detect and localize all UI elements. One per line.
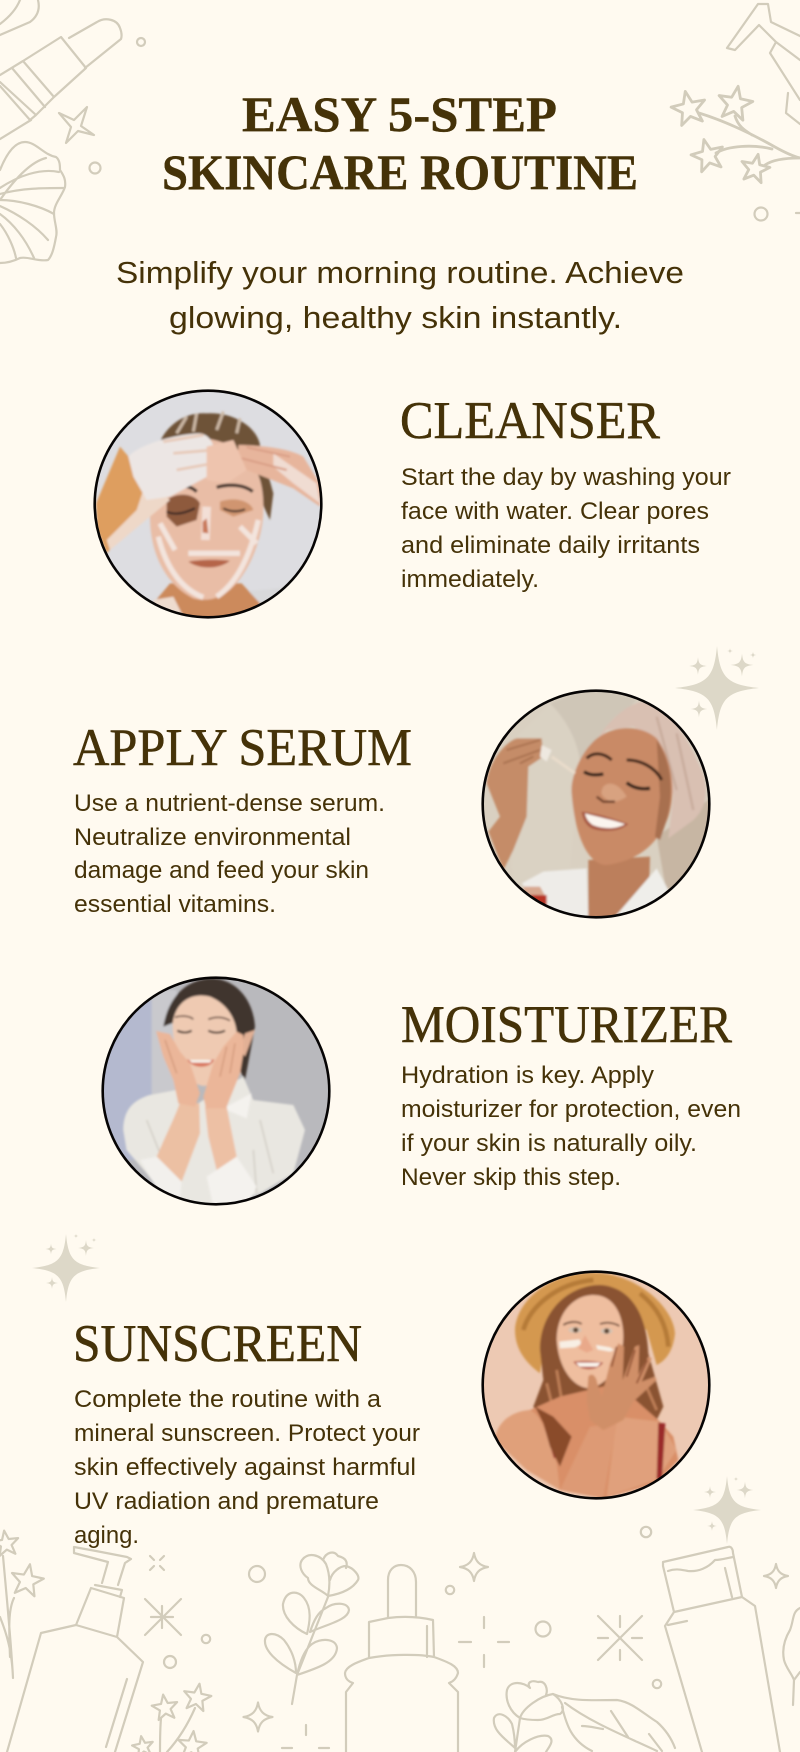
step 4 text: sunscreen: Complete the routine with a [74,1386,381,1413]
subtitle [116,256,684,335]
step 3 text: moisturizer: if your skin is naturally oily. [401,1130,697,1157]
decoration: bottom-center flower and leaf line art [494,1681,675,1752]
decoration: bottom-center dropper bottle line art [345,1565,458,1752]
photo: woman in straw hat applying sunscreen [480,1269,712,1501]
step 3 text: moisturizer: Never skip this step. [401,1164,621,1191]
title: EASY 5-STEP [242,86,557,142]
decoration: bottom-center sparkles and circles line art [446,1527,661,1688]
step 2 text: apply serum [73,719,412,918]
photo: woman with moisturized skin [100,975,332,1208]
decoration: top-right pump and star flowers line art [669,4,800,220]
step 2 text: apply serum: Use a nutrient-dense serum. [74,790,385,817]
title: SKINCARE ROUTINE [162,144,638,200]
photo: smiling woman applying serum [480,687,713,920]
step 3 text: moisturizer: MOISTURIZER [401,996,733,1054]
decoration: top-left dropper and shell line art [0,0,145,263]
step 4 text: sunscreen: skin effectively against harmful [74,1454,416,1481]
step 2 text: apply serum: Neutralize environmental [74,824,351,851]
step 4 text: sunscreen: SUNSCREEN [73,1315,362,1373]
decoration: sparkle cluster left [32,1234,100,1302]
step 3 text: moisturizer: Hydration is key. Apply [401,1062,655,1089]
step 1 text: cleanser: Start the day by washing your [401,464,731,491]
subtitle: Simplify your morning routine. Achieve [116,256,684,290]
decoration: bottom-right tube and leaf line art [663,1547,800,1752]
step 3 text: moisturizer: moisturizer for protection, even [401,1096,741,1123]
decoration: sparkle cluster upper right [675,646,759,730]
step 1 text: cleanser: and eliminate daily irritants [401,532,700,559]
step 2 text: apply serum: APPLY SERUM [73,719,412,777]
step 4 text: sunscreen [73,1315,420,1549]
step 4 text: sunscreen: aging. [74,1522,139,1549]
subtitle: glowing, healthy skin instantly. [169,301,622,335]
step 1 text: cleanser [400,392,731,593]
step 4 text: sunscreen: mineral sunscreen. Protect your [74,1420,420,1447]
step 4 text: sunscreen: UV radiation and premature [74,1488,379,1515]
photo: woman washing face with cleanser [90,385,326,623]
step 2 text: apply serum: essential vitamins. [74,891,276,918]
decoration: bottom-left pump bottle, flowers and stars line art [0,1529,265,1752]
step 1 text: cleanser: CLEANSER [400,392,661,450]
decoration: sparkle cluster lower right [693,1476,761,1544]
step 3 text: moisturizer [401,996,741,1191]
title [162,86,638,200]
step 1 text: cleanser: immediately. [401,566,539,593]
step 2 text: apply serum: damage and feed your skin [74,857,369,884]
decoration: bottom-center plant line art [244,1553,358,1748]
step 1 text: cleanser: face with water. Clear pores [401,498,709,525]
